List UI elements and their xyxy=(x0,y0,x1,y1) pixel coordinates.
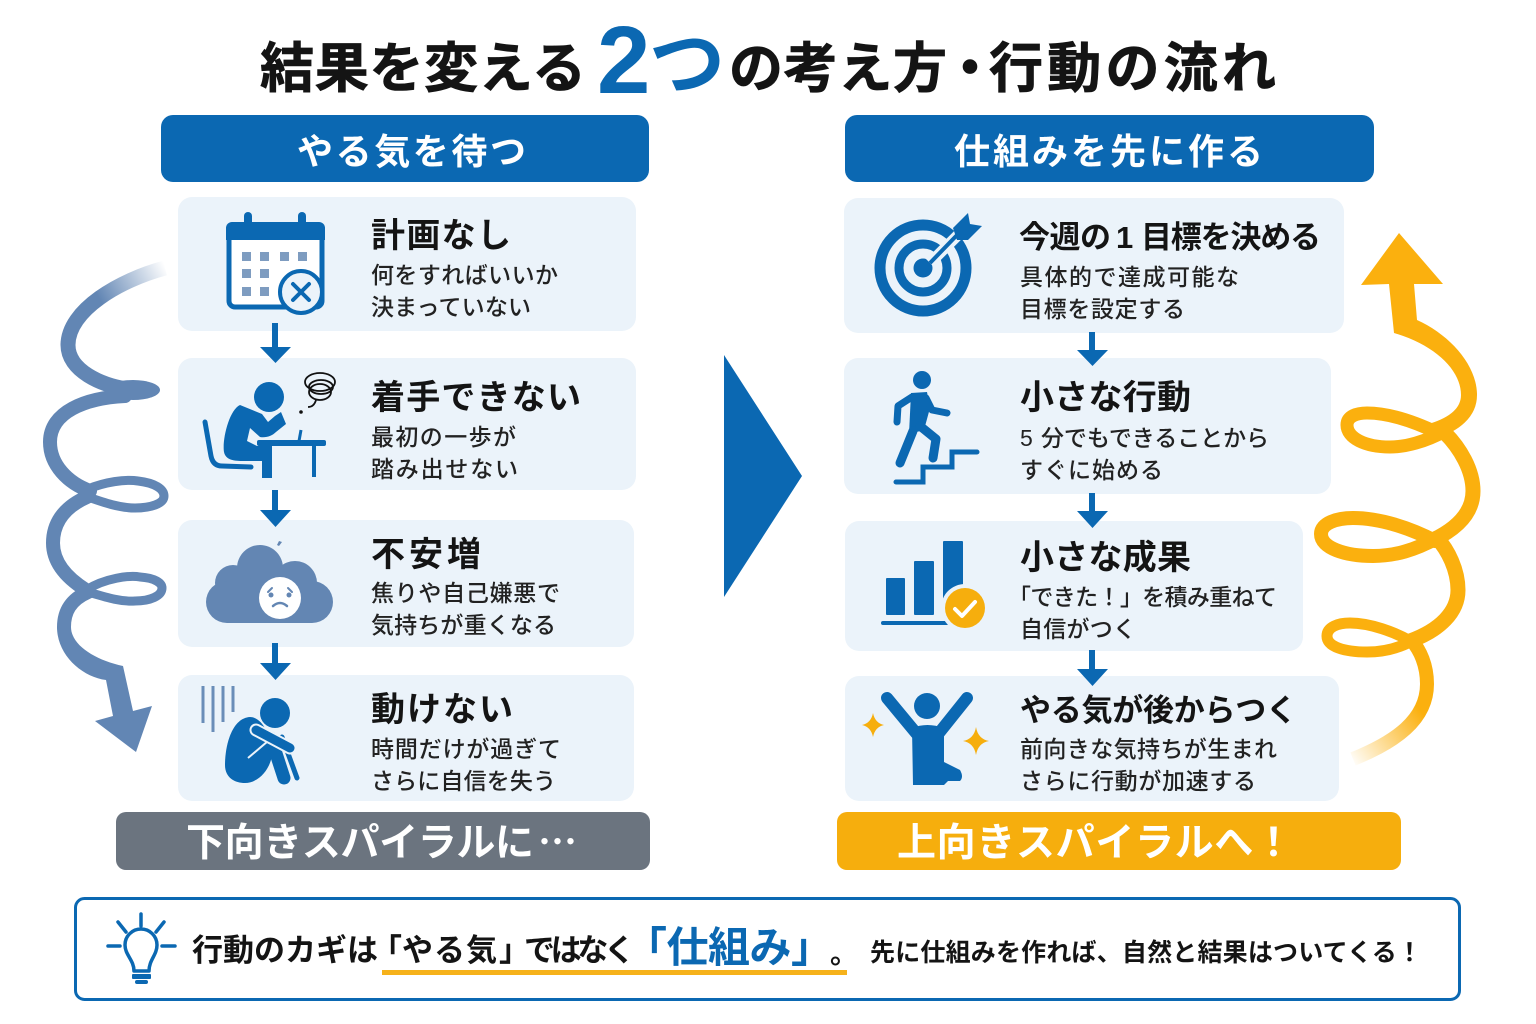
description xyxy=(371,580,560,638)
panel: small result xyxy=(845,521,1303,651)
underline xyxy=(382,970,847,975)
icon: target with dart xyxy=(880,213,982,311)
description: 気持ちが重くなる xyxy=(371,612,556,638)
description xyxy=(1020,264,1239,322)
full stop: 。 xyxy=(830,938,858,969)
description xyxy=(1008,584,1277,642)
panel: weekly goal xyxy=(844,198,1344,333)
panel: step 1 no plan xyxy=(178,197,636,331)
heading xyxy=(1019,220,1321,255)
icon: person cheering with sparkles xyxy=(862,693,989,785)
description: 5 xyxy=(1020,425,1033,451)
description: 時間だけが過ぎて xyxy=(371,736,561,762)
title xyxy=(260,7,1276,114)
arrow xyxy=(260,643,291,680)
right column header xyxy=(845,115,1374,182)
right column header: 仕組みを先に作る xyxy=(954,131,1263,172)
description: すぐに始める xyxy=(1020,457,1163,483)
icon: light bulb xyxy=(108,914,175,984)
panel: step 4 cannot move xyxy=(178,675,634,801)
description: 前向きな気持ちが生まれ xyxy=(1020,736,1277,762)
heading: 動けない xyxy=(371,691,513,729)
arrow xyxy=(1077,650,1108,686)
title: つ xyxy=(649,22,725,107)
arrow xyxy=(1077,332,1108,366)
arrow xyxy=(260,323,291,363)
panel: step 3 anxiety grows xyxy=(178,520,634,647)
icon: calendar with cross xyxy=(226,212,325,313)
icon: bar chart with check xyxy=(881,541,989,632)
description: 何をすればいいか xyxy=(371,262,558,288)
heading: 小さな成果 xyxy=(1020,539,1191,577)
icon: person climbing stairs xyxy=(896,371,977,482)
heading: 1 xyxy=(1116,220,1133,255)
heading: 今週の xyxy=(1019,220,1111,255)
arrow xyxy=(260,490,291,527)
message text: 行動のカギは xyxy=(192,933,378,968)
description: 自信がつく xyxy=(1020,616,1136,642)
heading: やる気が後からつく xyxy=(1020,693,1297,728)
banner: downward spiral xyxy=(116,812,650,870)
icon: troubled person at desk xyxy=(205,373,335,478)
description: 「できた！」を積み重ねて xyxy=(1008,584,1277,610)
title: 2 xyxy=(597,7,650,114)
message text: 」 xyxy=(499,933,530,968)
panel: step 2 cannot start xyxy=(178,358,636,490)
arrow xyxy=(1077,493,1108,528)
description: さらに行動が加速する xyxy=(1020,768,1256,794)
highlighted word: 「仕組み」 xyxy=(625,924,833,971)
left column header: やる気を待つ xyxy=(297,131,526,172)
heading: 着手できない xyxy=(371,379,581,417)
description xyxy=(371,262,558,320)
banner: upward spiral: 上向きスパイラルへ！ xyxy=(897,822,1293,865)
description: さらに自信を失う xyxy=(371,768,556,794)
upward spiral arrow xyxy=(1321,233,1477,759)
banner: downward spiral: … xyxy=(538,812,577,868)
icon: sad cloud xyxy=(206,541,333,623)
description xyxy=(371,424,518,482)
big arrow xyxy=(724,355,802,597)
description: 目標を設定する xyxy=(1020,296,1185,322)
title: の考え方 xyxy=(729,39,947,99)
heading: 小さな行動 xyxy=(1020,379,1191,417)
description: 焦りや自己嫌悪で xyxy=(371,580,560,606)
heading: 計画なし xyxy=(371,217,511,255)
banner: downward spiral: 下向きスパイラルに xyxy=(186,822,534,865)
title: ・ xyxy=(943,39,997,99)
message text: ではなく xyxy=(524,933,635,968)
downward spiral arrow xyxy=(50,268,165,752)
message text: やる気 xyxy=(402,933,497,968)
icon: crouching person xyxy=(203,686,297,783)
left column header xyxy=(161,115,649,182)
description: 踏み出せない xyxy=(371,456,518,482)
description: 決まっていない xyxy=(371,294,531,320)
title: 結果を変える xyxy=(260,39,586,99)
description xyxy=(371,736,561,794)
panel: motivation follows xyxy=(845,676,1339,801)
panel: small action xyxy=(844,358,1331,494)
message text: 「 xyxy=(371,933,402,968)
callout: key message xyxy=(76,898,1460,1000)
supporting text: 先に仕組みを作れば、自然と結果はついてくる！ xyxy=(870,939,1422,967)
description: 具体的で達成可能な xyxy=(1020,264,1239,290)
description: 分でもできることから xyxy=(1041,425,1269,451)
title: 行動の流れ xyxy=(989,39,1276,99)
heading: 目標を決める xyxy=(1141,220,1321,255)
description xyxy=(1020,736,1277,794)
heading: 不安増 xyxy=(371,536,481,574)
description: 最初の一歩が xyxy=(371,424,516,450)
banner: upward spiral xyxy=(837,812,1401,870)
description xyxy=(1020,425,1269,483)
